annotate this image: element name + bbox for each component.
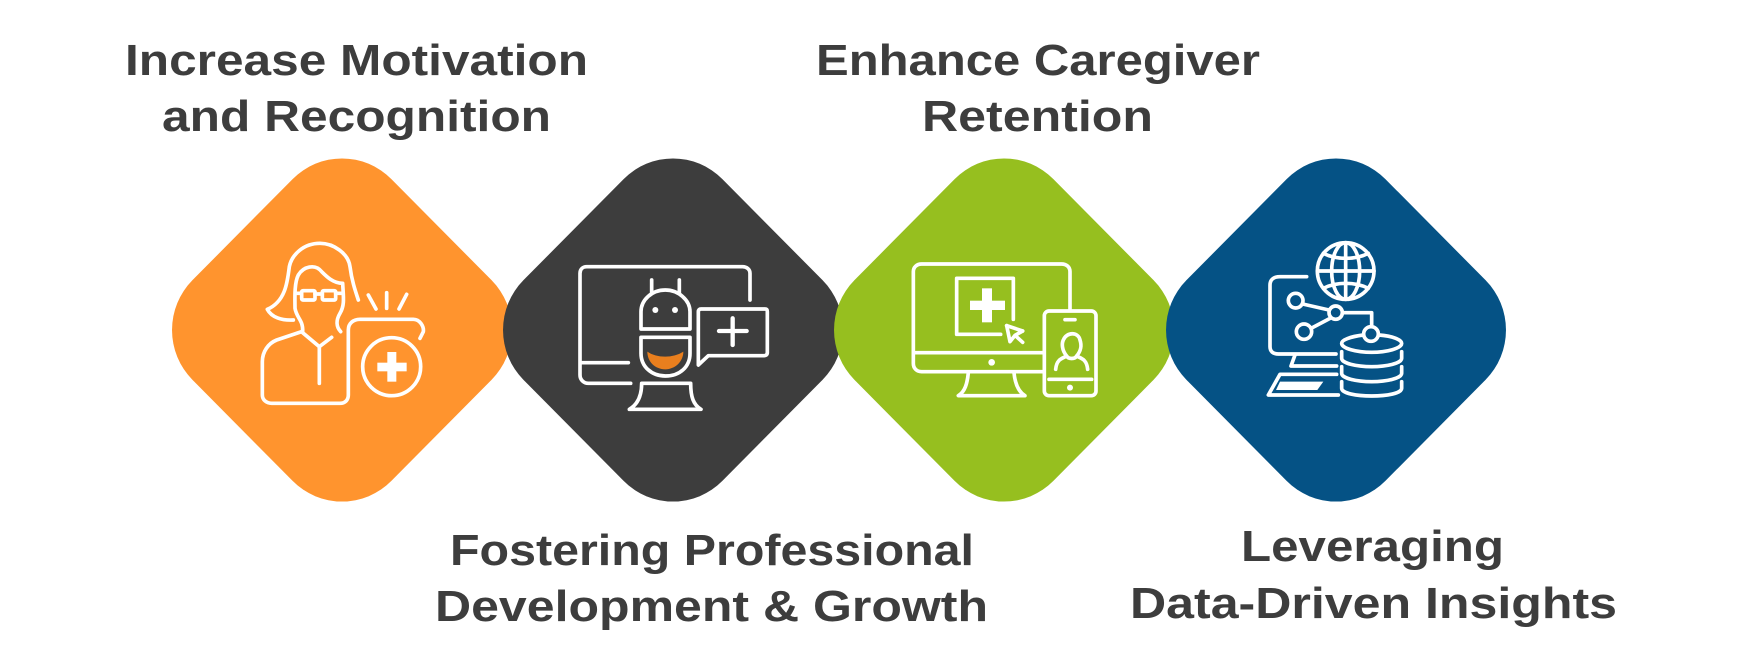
heading: Leveraging Data-Driven Insights: Leveraging	[1241, 522, 1504, 571]
panel: blue diamond	[1137, 129, 1535, 531]
heading: Increase Motivation and Recognition: Increase Motivation	[125, 36, 588, 85]
heading: Fostering Professional Development & Growth: Fostering Professional	[450, 526, 974, 575]
panel: orange diamond	[143, 129, 541, 531]
heading: Increase Motivation and Recognition	[125, 36, 588, 141]
heading: Enhance Caregiver Retention: Retention	[922, 92, 1153, 141]
heading: Increase Motivation and Recognition: and Recognition	[162, 92, 551, 141]
heading: Fostering Professional Development & Growth	[435, 526, 988, 631]
heading: Enhance Caregiver Retention	[816, 36, 1260, 141]
icon: data network, globe and database	[1268, 243, 1402, 396]
heading: Leveraging Data-Driven Insights: Data-Driven Insights	[1130, 579, 1617, 628]
heading: Fostering Professional Development & Growth: Development & Growth	[435, 582, 988, 631]
heading: Enhance Caregiver Retention: Enhance Caregiver	[816, 36, 1260, 85]
panel: green diamond	[805, 129, 1203, 531]
panel: dark diamond	[474, 129, 872, 531]
heading: Leveraging Data-Driven Insights	[1130, 522, 1617, 628]
icon: robot on monitor with chat bubble	[580, 267, 767, 409]
icon: woman with glasses and medical plus	[262, 243, 423, 403]
icon: monitor and phone with medical plus	[913, 264, 1096, 396]
